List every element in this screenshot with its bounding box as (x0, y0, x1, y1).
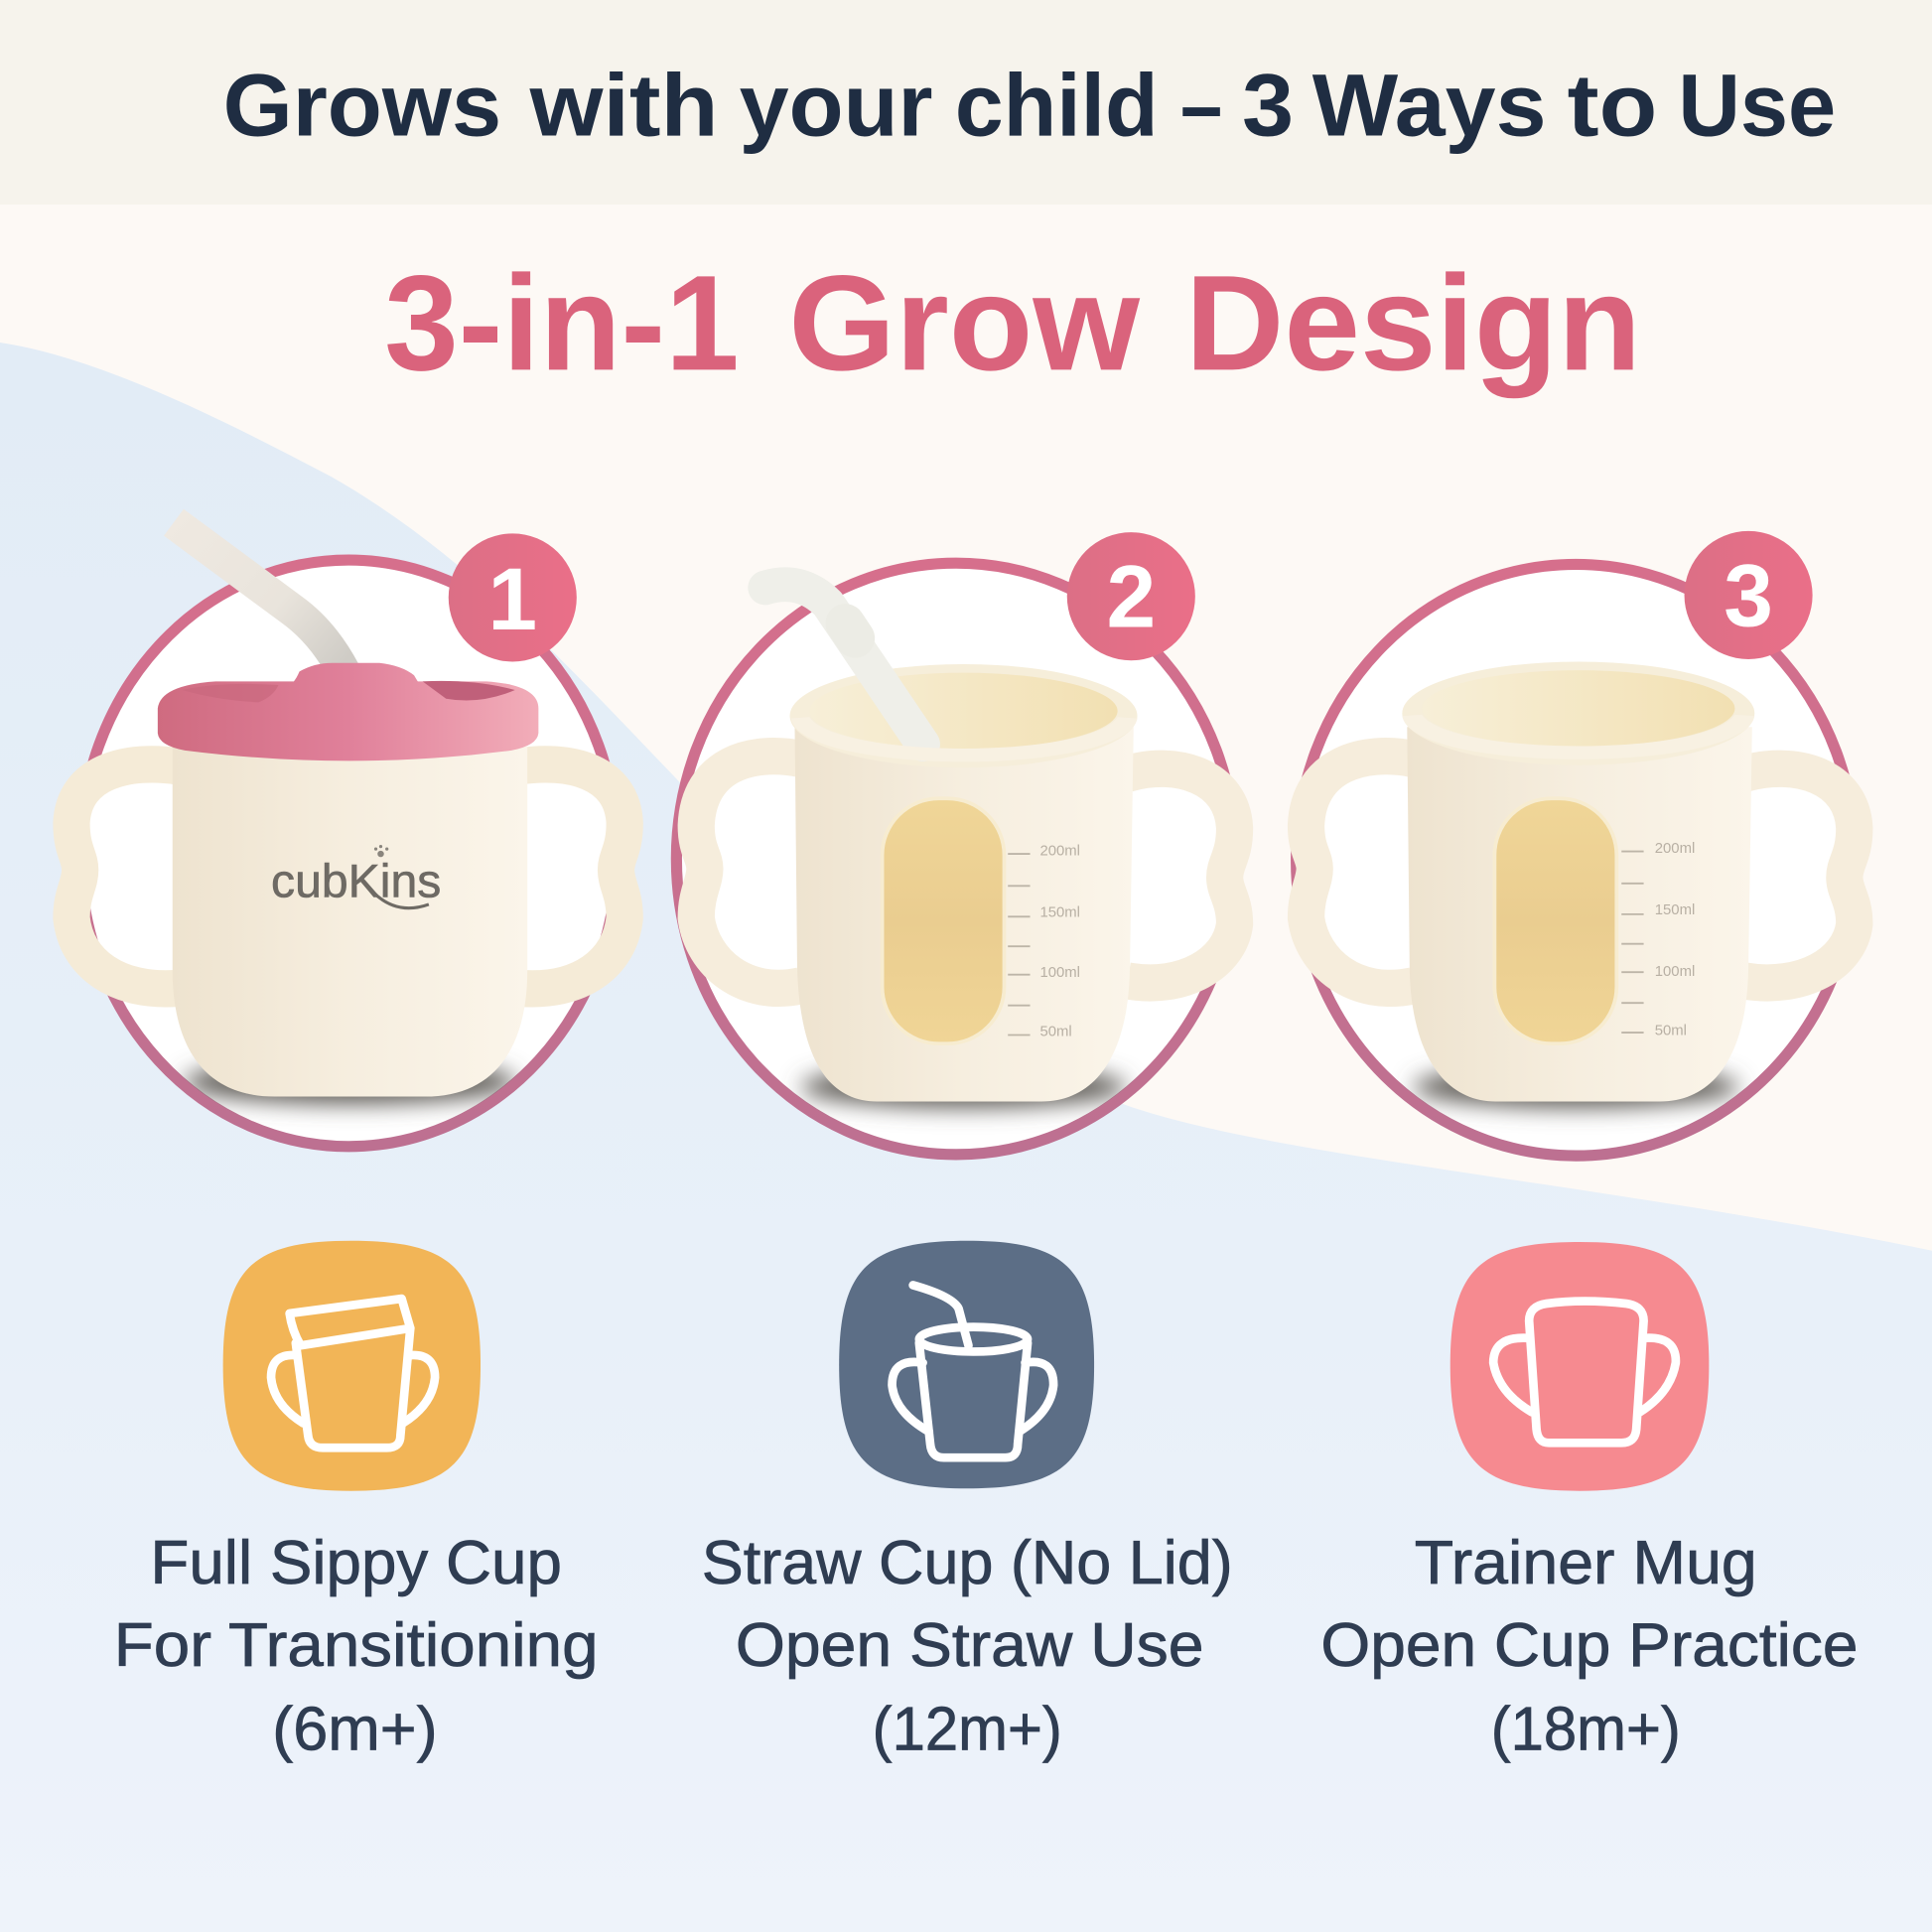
handles (696, 757, 1235, 988)
main title: Design (1185, 246, 1641, 398)
icon: sippy cup (223, 1241, 481, 1491)
top heading: Ways (1312, 56, 1547, 155)
pink lid (158, 663, 538, 760)
top heading: with (529, 56, 719, 155)
caption 1: (6m+) (272, 1695, 438, 1763)
caption 3: Open Cup Practice (1320, 1611, 1859, 1680)
main title (384, 246, 1641, 398)
top banner (0, 0, 1932, 205)
number badge 1: 1 (487, 549, 537, 648)
top heading: to (1568, 56, 1657, 155)
caption 2: Straw Cup (No Lid) (702, 1529, 1233, 1597)
measuring scale: 100ml (1655, 964, 1695, 980)
cup rim and interior (1402, 661, 1754, 765)
front rim (791, 717, 1138, 761)
handles (1307, 757, 1855, 988)
caption 2: (12m+) (873, 1695, 1062, 1763)
number badge 1 (449, 533, 577, 661)
caption 3: (18m+) (1491, 1695, 1681, 1763)
cup shadow (184, 1059, 516, 1104)
panel: straw cup (676, 532, 1236, 1155)
caption 2 (702, 1529, 1233, 1763)
cup shadow (801, 1066, 1126, 1108)
measuring scale: 100ml (1039, 965, 1080, 981)
measuring scale: 50ml (1655, 1023, 1687, 1038)
cup body (794, 727, 1134, 1102)
measuring scale (1008, 843, 1080, 1040)
top heading: – (1180, 56, 1222, 155)
cup body (1407, 727, 1752, 1102)
number badge 3 (1685, 531, 1813, 659)
front rim (1402, 715, 1754, 759)
ring 3 (1297, 564, 1856, 1156)
handles (71, 764, 624, 989)
caption 3 (1320, 1529, 1859, 1763)
icon: trainer mug (1450, 1242, 1709, 1491)
main title: Grow (788, 246, 1141, 398)
number badge 2: 2 (1106, 547, 1156, 646)
panel: full sippy cup (71, 522, 624, 1147)
top heading: Use (1678, 56, 1836, 155)
measuring scale: 200ml (1655, 841, 1695, 857)
top heading: 3 (1242, 56, 1294, 155)
top heading: Grows (223, 56, 501, 155)
measuring scale: 200ml (1039, 843, 1080, 859)
brand logo: cubKins (271, 854, 441, 906)
straw bead (845, 623, 855, 638)
caption 1: Full Sippy Cup (150, 1529, 562, 1597)
top heading: your (740, 56, 932, 155)
caption 1: For Transitioning (114, 1611, 599, 1680)
caption 2: Open Straw Use (736, 1611, 1204, 1680)
straw (765, 585, 923, 745)
caption 1 (114, 1529, 599, 1763)
cup body (173, 747, 527, 1097)
measuring scale: 150ml (1655, 902, 1695, 918)
icon: straw cup (839, 1241, 1094, 1488)
top heading (223, 56, 1836, 155)
ring 1 (80, 560, 618, 1147)
main title: 3-in-1 (384, 246, 740, 398)
straw (174, 522, 344, 671)
number badge 3: 3 (1724, 545, 1773, 644)
measuring scale (1621, 841, 1695, 1038)
cup rim and interior (790, 664, 1138, 767)
caption 3: Trainer Mug (1415, 1529, 1757, 1597)
cup shadow (1414, 1066, 1738, 1108)
panel: trainer mug (1297, 531, 1856, 1156)
number badge 2 (1067, 532, 1195, 660)
ring 2 (676, 563, 1236, 1155)
measuring scale: 150ml (1039, 904, 1080, 920)
measuring scale: 50ml (1039, 1025, 1072, 1040)
top heading: child (955, 56, 1159, 155)
measuring window (1494, 798, 1616, 1043)
measuring window (883, 798, 1004, 1043)
